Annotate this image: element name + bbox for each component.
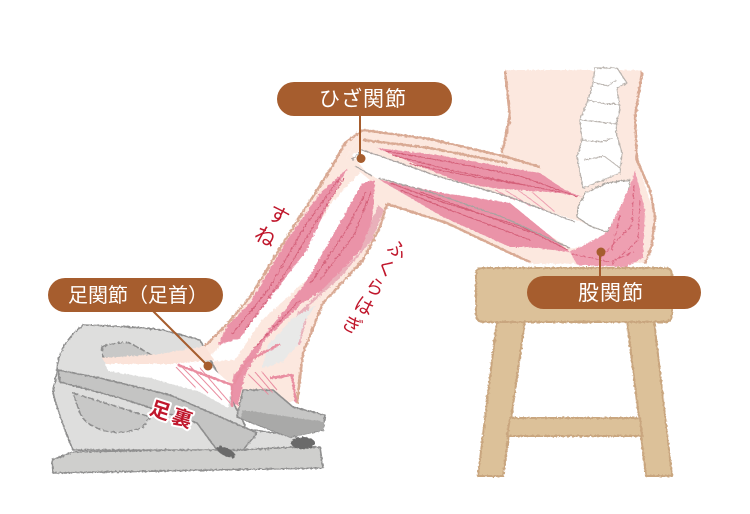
thigh muscle fibres — [385, 151, 578, 250]
shin muscle — [218, 168, 348, 345]
leg — [102, 130, 645, 420]
shin bone — [205, 172, 370, 362]
label: sole: 足 — [147, 398, 173, 425]
calf muscle fibres — [254, 192, 371, 348]
dark foot pegs — [215, 437, 315, 460]
machine base — [52, 447, 323, 473]
thigh skin — [346, 130, 605, 262]
ankle leader — [153, 311, 212, 370]
label: shin — [250, 201, 293, 252]
shin skin — [102, 130, 387, 420]
label: calf: ぎ — [338, 312, 365, 340]
footrest dark band — [240, 410, 325, 437]
label: shin: す — [263, 201, 293, 231]
spine vertebra lines — [580, 80, 620, 168]
machine shell — [53, 325, 245, 450]
shin muscle fibres — [232, 178, 344, 334]
lower thigh muscle — [380, 180, 570, 252]
foot sole bone — [105, 360, 232, 408]
hip muscle — [570, 170, 645, 267]
hip muscle fibres — [572, 185, 640, 264]
label: sole: 裏 — [169, 405, 195, 433]
leader lines and dots — [153, 115, 606, 370]
femur bone — [352, 150, 607, 248]
back of calf outline — [297, 204, 387, 403]
label: knee joint — [277, 82, 452, 116]
foot — [102, 344, 296, 408]
deep calf muscle — [292, 205, 384, 345]
label: calf: ふ — [383, 236, 410, 264]
upper drum — [102, 342, 157, 358]
torso skin — [400, 70, 655, 264]
label: calf: ら — [361, 274, 388, 302]
upper thigh muscle — [377, 148, 582, 197]
label: hip joint — [527, 276, 701, 309]
lower drum — [73, 393, 150, 432]
bone outlines — [352, 150, 575, 248]
stool legs and crossbar — [478, 320, 672, 476]
foot top skin — [102, 346, 214, 364]
thigh hatching — [495, 190, 555, 212]
stool — [476, 268, 672, 476]
calf muscle — [230, 180, 375, 405]
front of leg outline — [203, 130, 540, 348]
foot exercise machine — [52, 325, 325, 473]
label: ankle joint: 足関節（足首） — [68, 284, 208, 307]
label: calf — [338, 236, 410, 340]
knee leader — [356, 115, 366, 163]
label: knee joint: ひざ関節 — [319, 87, 407, 111]
support under footrest — [240, 428, 296, 450]
torso outlines — [502, 71, 655, 264]
label: ankle joint — [48, 278, 223, 312]
label: calf: は — [350, 293, 377, 321]
pedal plate — [58, 370, 257, 450]
label: sole — [147, 398, 195, 433]
foot sole hatching — [176, 366, 277, 403]
ankle tendons — [178, 344, 296, 407]
spine — [577, 68, 627, 188]
hip leader — [596, 248, 606, 280]
label: shin: ね — [250, 222, 280, 252]
body: torso and hip — [400, 68, 655, 264]
stool seat — [476, 268, 672, 322]
label: hip joint: 股関節 — [578, 282, 644, 305]
footrest — [237, 390, 325, 437]
pelvis bone — [577, 180, 630, 232]
gray lower leg bone — [262, 305, 316, 368]
label: calf: く — [372, 255, 399, 283]
